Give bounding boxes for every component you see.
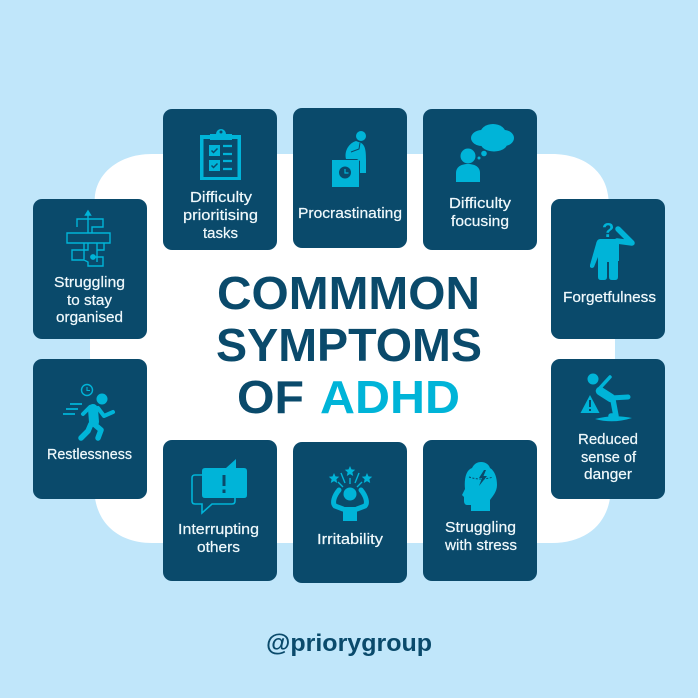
label: organised — [56, 310, 123, 326]
label: Difficulty — [449, 196, 512, 212]
label — [578, 432, 638, 483]
label: tasks — [203, 226, 238, 242]
icon: frustrated person with stars — [329, 466, 372, 521]
label: to stay — [67, 293, 113, 309]
label: Restlessness — [47, 447, 132, 463]
card: forgetfulness — [551, 199, 665, 339]
card: procrastinating — [293, 108, 407, 248]
title: OF — [237, 371, 304, 423]
icon: running person with clock — [63, 384, 113, 438]
label — [54, 275, 125, 326]
card: restlessness — [33, 359, 147, 499]
card: interrupting others — [163, 440, 277, 581]
label — [449, 196, 512, 230]
card: difficulty prioritising tasks — [163, 109, 277, 250]
label: danger — [584, 467, 632, 483]
icon: person thinking on clock box — [332, 131, 366, 187]
title: ADHD — [320, 371, 460, 423]
label: Difficulty — [190, 190, 253, 206]
title: SYMPTOMS — [216, 319, 482, 371]
label: Struggling — [445, 520, 516, 536]
title: COMMMON — [217, 267, 480, 319]
label: with stress — [444, 538, 517, 554]
icon: tangled flowchart — [67, 211, 110, 266]
label: sense of — [581, 450, 637, 466]
card: difficulty focusing — [423, 109, 537, 250]
icon: person slipping with warning — [580, 374, 632, 421]
label: focusing — [451, 214, 509, 230]
label: others — [197, 540, 240, 556]
label: Reduced — [578, 432, 638, 448]
icon: head with storm cloud — [462, 462, 497, 511]
label — [183, 190, 258, 242]
title — [216, 267, 482, 423]
label: Interrupting — [178, 522, 259, 538]
label: Procrastinating — [298, 206, 402, 222]
icon: person with thought cloud — [456, 124, 514, 182]
label: Irritability — [317, 532, 384, 548]
label: Struggling — [54, 275, 125, 291]
icon: clipboard checklist — [200, 129, 241, 180]
icon: person with question mark: ? — [602, 220, 614, 242]
label — [444, 520, 517, 554]
label: prioritising — [183, 208, 258, 224]
label: Forgetfulness — [563, 290, 656, 306]
icon: overlapping speech bubbles — [192, 459, 247, 513]
card: struggling with stress — [423, 440, 537, 581]
label — [178, 522, 259, 556]
card: irritability — [293, 442, 407, 583]
white central panel — [90, 154, 615, 543]
card: reduced sense of danger — [551, 359, 665, 499]
card: struggling to stay organised — [33, 199, 147, 339]
social handle: @priorygroup — [266, 630, 432, 657]
